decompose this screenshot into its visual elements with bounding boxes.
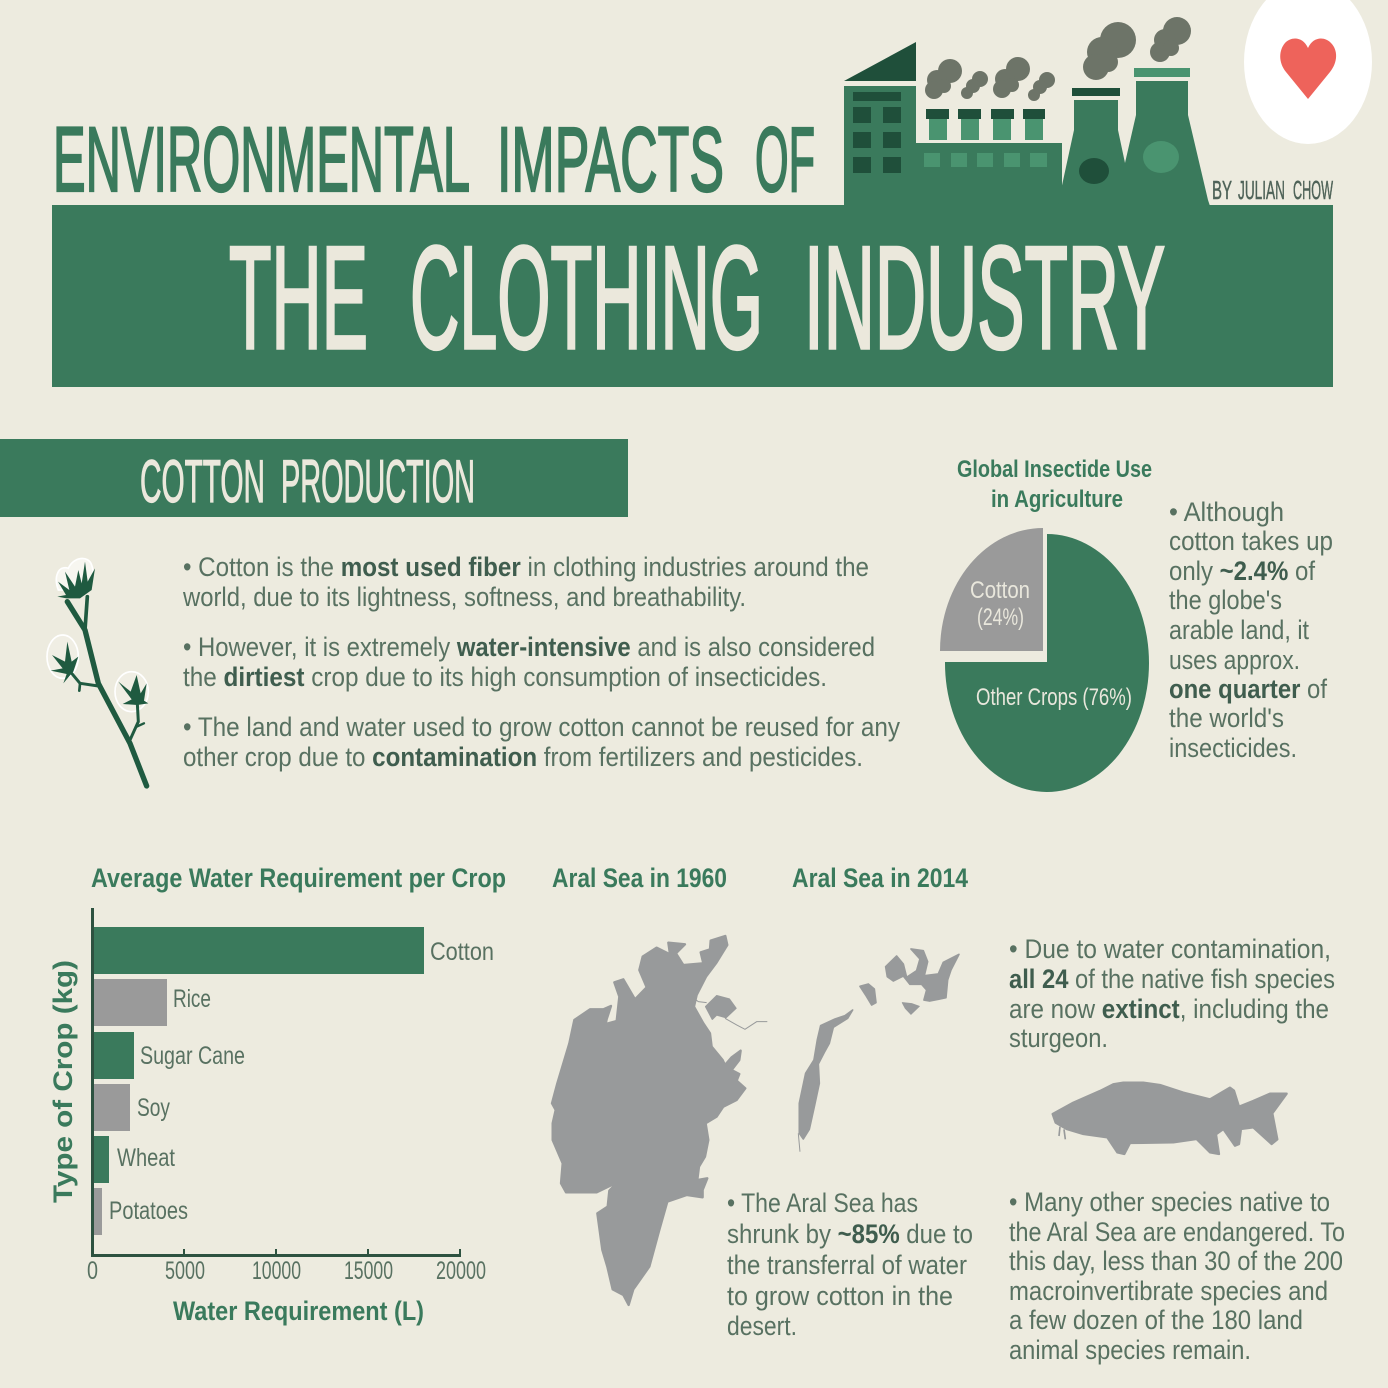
title: the clothing industry: CLOTHING xyxy=(410,216,763,379)
text block: aral sea shrinkage: to grow cotton in the xyxy=(727,1281,953,1311)
text block: cotton facts: world, due to its lightness, softness, and breathability. xyxy=(182,582,746,612)
text block: native fish extinct: are now extinct, including the xyxy=(1009,994,1329,1024)
heading: global insecticide use xyxy=(957,456,1152,513)
pie chart: insecticide share: Cotton xyxy=(970,577,1030,604)
text block: endangered species xyxy=(1009,1187,1345,1365)
text block: endangered species: a few dozen of the 180 land xyxy=(1009,1305,1303,1335)
section panel: cotton production: PRODUCTION xyxy=(281,448,475,515)
text block: land vs insecticides: only ~2.4% of xyxy=(1169,556,1315,586)
pie chart: insecticide share: Other Crops (76%) xyxy=(976,684,1132,711)
text block: native fish extinct: • Due to water contamination, xyxy=(1009,934,1331,964)
text block: cotton facts: the dirtiest crop due to its high consumption of insecticides. xyxy=(183,662,827,692)
title: environmental impacts of: IMPACTS xyxy=(497,109,724,211)
section panel: cotton production xyxy=(0,439,628,517)
heading: global insecticide use: Global Insectide Use xyxy=(957,456,1152,483)
byline: JULIAN xyxy=(1238,175,1285,205)
text block: land vs insecticides xyxy=(1169,497,1333,763)
text block: cotton facts: • However, it is extremely water-intensive and is also considered xyxy=(183,632,875,662)
text block: land vs insecticides: • Although xyxy=(1169,497,1284,527)
bar chart: water requirement per crop: 5000 xyxy=(165,1257,205,1285)
text block: endangered species: this day, less than 30 of the 200 xyxy=(1009,1246,1343,1276)
text block: aral sea shrinkage: the transferral of water xyxy=(727,1250,967,1280)
heading: global insecticide use: in Agriculture xyxy=(991,486,1123,513)
bar chart: water requirement per crop: Sugar Cane xyxy=(140,1042,245,1070)
text: CHOW xyxy=(1293,175,1333,205)
text block: cotton facts: • The land and water used to grow cotton cannot be reused for any xyxy=(183,712,900,742)
bar chart: water requirement per crop: Water Requirement (L) xyxy=(173,1296,424,1326)
text block: land vs insecticides: insecticides. xyxy=(1169,733,1297,763)
text block: land vs insecticides: one quarter of xyxy=(1169,674,1327,704)
bar chart: water requirement per crop: Cotton xyxy=(430,938,494,966)
bar chart: water requirement per crop: Type of Crop (kg) xyxy=(48,960,78,1203)
bar chart: water requirement per crop: 15000 xyxy=(344,1257,393,1285)
bar chart: water requirement per crop: Wheat xyxy=(117,1144,175,1172)
heading: water requirement chart: Average Water Requirement per Crop xyxy=(91,863,506,893)
text block: aral sea shrinkage: shrunk by ~85% due to xyxy=(727,1219,973,1249)
bar chart: water requirement per crop: 0 xyxy=(87,1257,98,1285)
text block: land vs insecticides: cotton takes up xyxy=(1169,526,1333,556)
icon: heart badge xyxy=(1244,0,1372,144)
bar chart: water requirement per crop: 20000 xyxy=(436,1257,486,1285)
text block: land vs insecticides: the world's xyxy=(1169,703,1284,733)
heading: aral sea 1960: Aral Sea in 1960 xyxy=(552,863,727,893)
text block: land vs insecticides: uses approx. xyxy=(1169,645,1300,675)
text block: cotton facts xyxy=(182,552,900,772)
pie chart: insecticide share xyxy=(940,528,1149,792)
pie chart: insecticide share: (24%) xyxy=(977,604,1024,631)
text block: cotton facts: other crop due to contamination from fertilizers and pesticides. xyxy=(183,742,863,772)
text block: cotton facts: • Cotton is the most used fiber in clothing industries around the xyxy=(183,552,869,582)
bar chart: water requirement per crop: 10000 xyxy=(252,1257,301,1285)
text block: aral sea shrinkage xyxy=(727,1188,973,1341)
text block: native fish extinct: sturgeon. xyxy=(1009,1023,1108,1053)
title: the clothing industry: THE xyxy=(229,216,368,379)
text block: aral sea shrinkage: desert. xyxy=(727,1311,797,1341)
heading: aral sea 2014: Aral Sea in 2014 xyxy=(792,863,968,893)
bar chart: water requirement per crop: Rice xyxy=(173,985,211,1013)
section panel: cotton production: COTTON xyxy=(140,448,265,515)
bar chart: water requirement per crop: Potatoes xyxy=(109,1197,188,1225)
text block: endangered species: the Aral Sea are endangered. To xyxy=(1009,1217,1345,1247)
text block: native fish extinct: all 24 of the native fish species xyxy=(1009,964,1335,994)
text block: aral sea shrinkage: • The Aral Sea has xyxy=(727,1188,918,1218)
map: aral sea 2014 xyxy=(798,949,959,1152)
icon: factory xyxy=(844,17,1210,206)
banner panel xyxy=(52,205,1333,387)
text block: land vs insecticides: arable land, it xyxy=(1169,615,1309,645)
byline: BY xyxy=(1212,175,1232,205)
bar chart: water requirement per crop xyxy=(48,908,494,1326)
text block: endangered species: • Many other species native to xyxy=(1009,1187,1330,1217)
text block: native fish extinct xyxy=(1009,934,1335,1053)
text: OF xyxy=(755,109,815,211)
icon: cotton branch xyxy=(47,558,148,786)
text block: endangered species: macroinvertibrate species and xyxy=(1009,1276,1328,1306)
title: environmental impacts of: ENVIRONMENTAL xyxy=(53,109,470,211)
text block: land vs insecticides: the globe's xyxy=(1169,585,1282,615)
text block: endangered species: animal species remain. xyxy=(1009,1335,1251,1365)
icon: sturgeon fish xyxy=(1053,1083,1287,1154)
map: aral sea 1960 xyxy=(552,936,767,1305)
bar chart: water requirement per crop: Soy xyxy=(137,1094,170,1122)
